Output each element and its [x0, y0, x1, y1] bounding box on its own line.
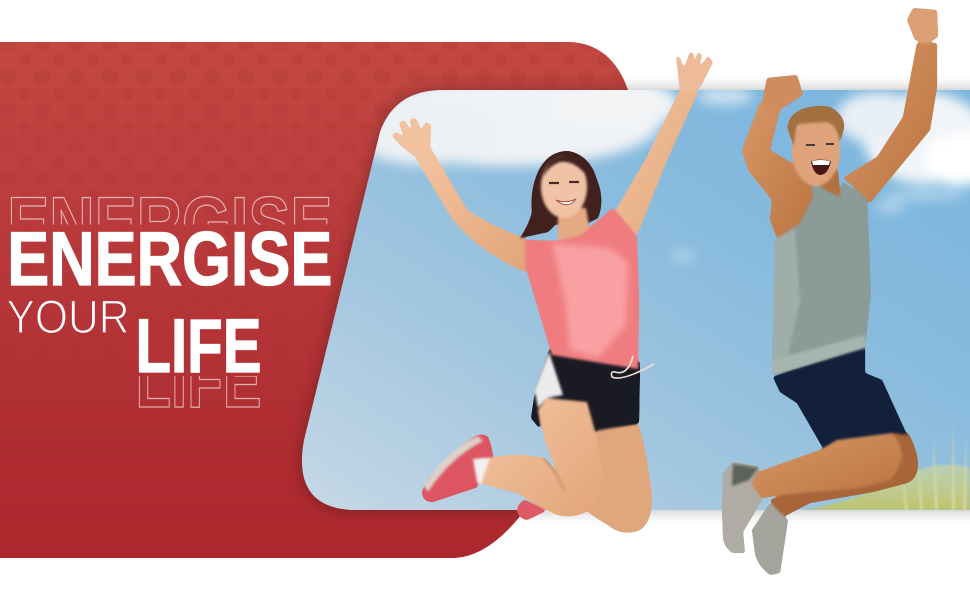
arm right	[843, 43, 937, 203]
shorts	[773, 348, 907, 448]
fist right	[907, 8, 938, 44]
t-shirt	[525, 208, 639, 369]
photo drop shadow	[302, 90, 970, 510]
back leg and shoe	[517, 425, 652, 533]
teeth	[812, 160, 830, 165]
man's facial features	[806, 144, 834, 175]
neck	[558, 208, 590, 240]
knee crease	[543, 458, 564, 490]
front leg	[480, 398, 602, 516]
shorts	[531, 350, 640, 431]
clouds: left	[355, 77, 753, 166]
hand right	[676, 52, 713, 94]
arm left	[415, 147, 527, 272]
shoe toe panel	[732, 464, 758, 486]
panel: sky photo	[290, 77, 970, 515]
face	[541, 156, 587, 218]
smile	[556, 199, 576, 205]
hand left	[392, 118, 431, 158]
title: YOUR: YOUR	[6, 290, 130, 343]
title: LIFE outline echo: LIFE	[136, 339, 262, 424]
fist left	[762, 75, 803, 110]
front shoe	[722, 462, 762, 553]
mouth	[811, 160, 831, 175]
figure: jumping woman	[392, 52, 713, 533]
eyes	[549, 182, 579, 183]
title: ENERGISE outline echo: ENERGISE	[7, 182, 332, 267]
shoe	[422, 435, 493, 502]
panel: red background	[0, 42, 628, 558]
back shoe	[752, 503, 788, 575]
hair	[788, 106, 844, 146]
face	[792, 114, 840, 186]
title: LIFE: LIFE	[136, 304, 262, 389]
drawstring	[611, 356, 654, 378]
clouds: right	[673, 92, 970, 260]
neck	[808, 170, 840, 197]
front leg	[752, 433, 902, 498]
eyes	[806, 144, 834, 145]
hair	[520, 151, 601, 238]
t-shirt highlight	[552, 243, 628, 358]
grass	[806, 428, 970, 510]
figure: jumping man	[722, 8, 938, 575]
back leg	[770, 433, 918, 517]
tank top	[772, 175, 871, 375]
sock	[473, 458, 490, 484]
woman's facial features and drawstring	[549, 182, 654, 378]
arm right	[616, 90, 698, 235]
hairline	[543, 156, 587, 178]
arm left	[742, 103, 813, 238]
title: ENERGISE: ENERGISE	[7, 217, 332, 302]
